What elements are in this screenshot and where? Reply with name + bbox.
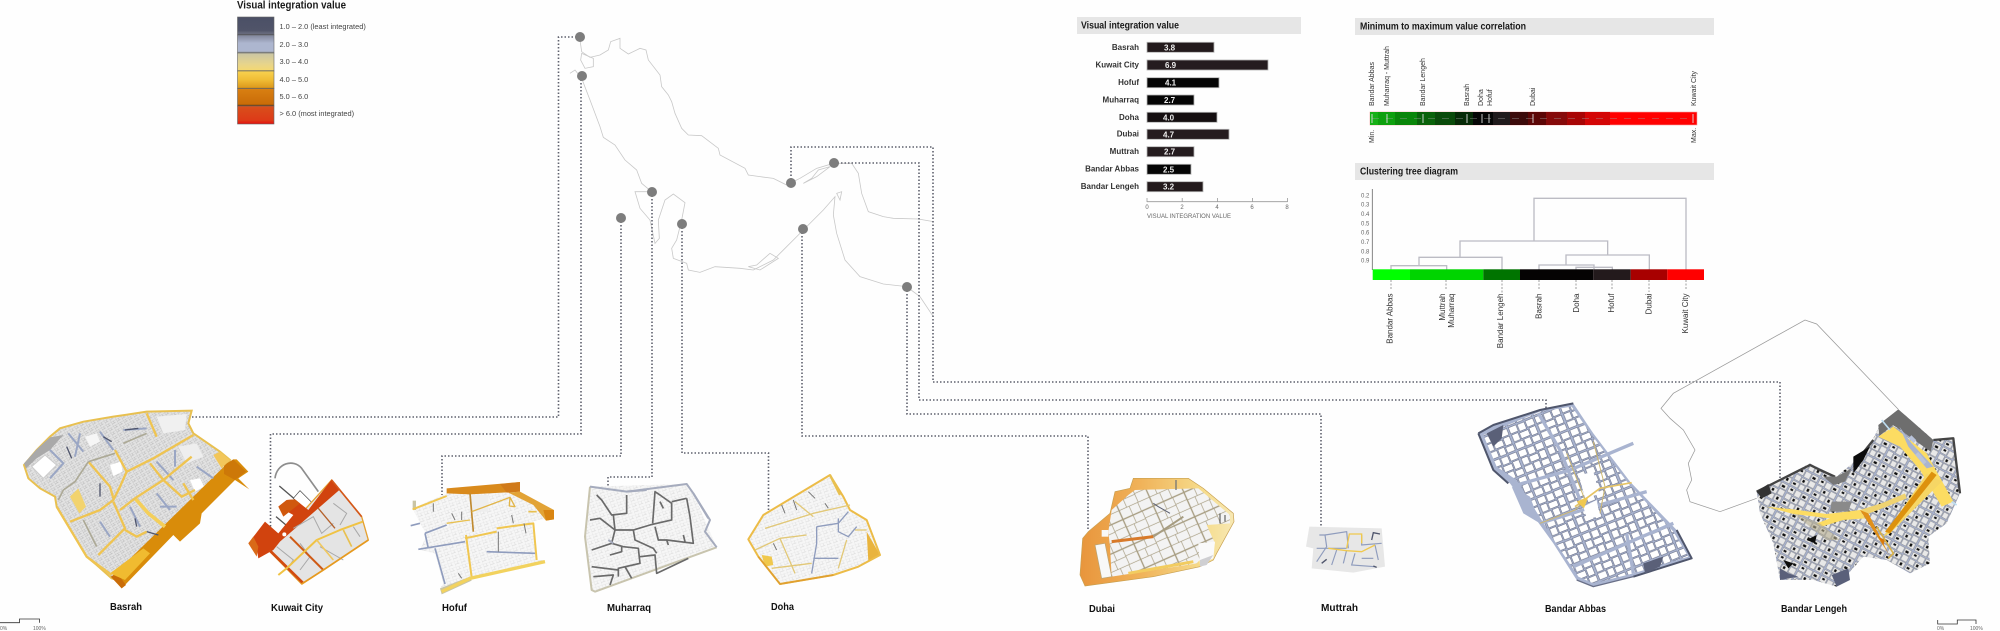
cluster labels: Bandar Lengeh [1496, 294, 1505, 348]
map: Dubai [1080, 478, 1234, 586]
correlation heading: Minimum to maximum value correlation [1360, 22, 1526, 32]
label: Dubai: Dubai [1089, 603, 1115, 615]
connector: Muttrah [907, 287, 1321, 527]
bar values: 2.7 [1164, 148, 1176, 157]
map: Hofuf [411, 482, 554, 594]
clustering heading: Clustering tree diagram [1360, 166, 1458, 178]
dendrogram scale: 0.6 [1361, 231, 1370, 237]
label: Hofuf: Hofuf [442, 602, 467, 614]
correlation labels: Muharraq - Muttrah [1384, 46, 1391, 106]
connector: Muharraq [608, 192, 652, 492]
dendrogram branches [1391, 198, 1686, 270]
location markers [575, 32, 912, 292]
correlation labels: Basrah [1464, 84, 1471, 106]
bar chart axis: 2 [1180, 205, 1184, 211]
dendrogram scale: 0.3 [1361, 203, 1370, 209]
map of the Gulf coastline [570, 38, 933, 317]
cluster colour bar [1373, 269, 1704, 280]
bar labels: Bandar Abbas [1085, 164, 1140, 174]
connector: Bandar Lengeh [791, 147, 1780, 480]
bar labels: Doha [1119, 113, 1140, 122]
map: Muharraq [585, 484, 717, 592]
connector: Hofuf [442, 218, 621, 495]
correlation colour bar [1370, 112, 1697, 125]
connector: Dubai [802, 229, 1088, 530]
legend labels: > 6.0 (most integrated) [280, 109, 354, 118]
bar chart axis: 0 [1145, 205, 1149, 211]
map: Muttrah [1306, 527, 1385, 573]
legend labels: 5.0 – 6.0 [280, 92, 308, 101]
cluster labels: Doha [1572, 293, 1581, 313]
legend labels [280, 22, 366, 118]
bar labels: Basrah [1112, 43, 1139, 52]
legend labels: 3.0 – 4.0 [280, 57, 308, 66]
cluster leaders [1391, 280, 1686, 293]
bar chart heading [1077, 17, 1301, 34]
correlation labels: Bandar Abbas [1369, 62, 1376, 106]
map: Bandar Lengeh [1757, 409, 1960, 587]
map: Doha [748, 475, 880, 584]
outline: Bandar Lengeh context boundary [1661, 320, 1898, 512]
dendrogram scale: 0.7 [1361, 240, 1370, 246]
connector: Doha [682, 224, 768, 510]
bar values: 4.0 [1163, 113, 1175, 122]
bar values: 2.7 [1164, 96, 1176, 105]
connector: Kuwait City [270, 76, 581, 527]
bar labels: Dubai [1117, 130, 1139, 138]
bar values: 3.2 [1163, 183, 1175, 192]
cluster labels: Muharraq [1447, 294, 1456, 328]
bar values: 4.1 [1165, 79, 1177, 88]
scale bar: left [0, 619, 46, 631]
label: Bandar Abbas: Bandar Abbas [1545, 603, 1606, 615]
label: Muharraq: Muharraq [607, 602, 651, 614]
cluster labels: Kuwait City [1681, 294, 1690, 334]
correlation labels: Min. [1369, 130, 1376, 143]
clustering heading [1355, 163, 1714, 180]
bar chart axis [1145, 198, 1289, 220]
bar chart axis: 6 [1250, 205, 1254, 211]
connector: Basrah [190, 37, 580, 417]
label: Kuwait City: Kuwait City [271, 602, 323, 614]
correlation labels [1369, 46, 1698, 143]
dendrogram scale: 0.2 [1361, 193, 1370, 199]
map: Bandar Abbas [1478, 403, 1692, 587]
correlation labels: Hofuf [1487, 89, 1494, 106]
bar values: 4.7 [1163, 130, 1175, 139]
legend labels: 4.0 – 5.0 [280, 75, 308, 84]
connector: Bandar Abbas [834, 163, 1546, 410]
bar labels: Muharraq [1103, 96, 1139, 104]
scale bar: right [1937, 620, 1983, 631]
correlation panel [1355, 18, 1714, 143]
label: Muttrah: Muttrah [1321, 602, 1358, 614]
label: Basrah: Basrah [110, 601, 142, 613]
correlation labels: Max. [1691, 128, 1698, 143]
clustering tree panel [1355, 163, 1714, 348]
bar chart axis: VISUAL INTEGRATION VALUE [1147, 214, 1231, 220]
correlation labels: Kuwait City [1691, 70, 1698, 106]
dendrogram scale: 0.5 [1361, 221, 1370, 227]
bars [1147, 42, 1268, 192]
bar labels: Kuwait City [1095, 60, 1140, 70]
cluster labels: Hofuf [1607, 293, 1616, 313]
dendrogram scale [1361, 189, 1372, 270]
connector dotted lines [190, 37, 1780, 530]
bar values: 6.9 [1165, 61, 1177, 70]
dendrogram scale: 0.4 [1361, 212, 1370, 218]
bar labels: Bandar Lengeh [1081, 182, 1139, 191]
correlation labels: Bandar Lengeh [1420, 58, 1427, 106]
legend: visual integration value [237, 0, 366, 124]
bar chart panel [1077, 17, 1301, 220]
correlation heading [1355, 18, 1714, 35]
label: Doha: Doha [771, 601, 794, 613]
legend swatches [238, 17, 274, 124]
dendrogram scale: 0.8 [1361, 249, 1370, 255]
map: Kuwait City [248, 463, 368, 584]
legend labels: 2.0 – 3.0 [280, 40, 308, 49]
cluster labels: Bandar Abbas [1386, 294, 1394, 344]
cluster labels: Basrah [1535, 294, 1544, 319]
bar values [1163, 43, 1177, 192]
cluster labels: Dubai [1645, 293, 1654, 314]
bar labels: Hofuf [1118, 78, 1139, 87]
bar values: 2.5 [1163, 165, 1175, 174]
dendrogram scale: 0.9 [1361, 259, 1370, 265]
bar labels [1081, 43, 1140, 191]
bar chart heading: Visual integration value [1081, 20, 1179, 32]
label: Bandar Lengeh: Bandar Lengeh [1781, 603, 1847, 615]
cluster labels: Muttrah [1438, 294, 1447, 321]
map: Basrah [24, 411, 249, 588]
legend labels: 1.0 – 2.0 (least integrated) [280, 22, 366, 31]
bar labels: Muttrah [1110, 147, 1139, 156]
bar values: 3.8 [1164, 43, 1176, 52]
correlation labels: Doha [1478, 89, 1485, 106]
bar chart axis: 4 [1215, 205, 1219, 211]
correlation labels: Dubai [1530, 87, 1537, 106]
cluster labels [1386, 293, 1690, 348]
bar chart axis: 8 [1285, 205, 1289, 211]
